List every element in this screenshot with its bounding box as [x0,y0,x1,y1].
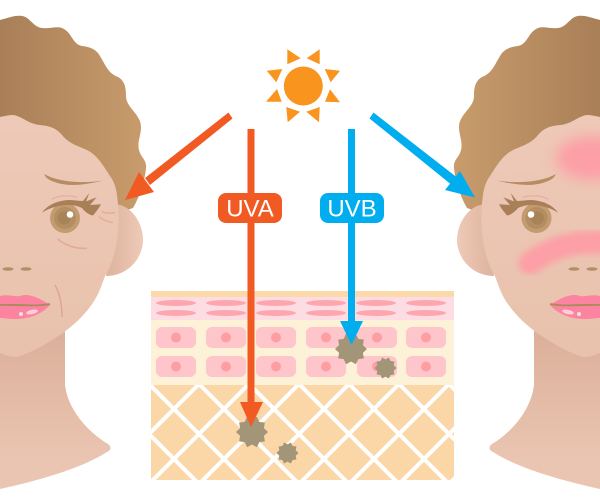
right eyebrow [497,174,556,185]
stratum corneum: pink layer with flat cells [151,297,454,320]
arrow: UVB to right face [370,112,475,198]
skin cross-section diagram [74,291,574,499]
left face skin [0,115,119,357]
melanin spot: dermis small [276,443,299,463]
left nose [2,267,32,271]
left lips [0,295,50,319]
right eye [499,193,558,233]
left cheek wrinkle [58,239,87,248]
left ear [106,204,143,276]
right face: sunburned skin from UVB [454,16,600,489]
melanin spot: epidermis large [335,334,367,364]
right hair [454,16,600,220]
label: UVA: UVA [226,196,274,222]
melanin spot: epidermis small [374,358,397,378]
arrow: UVA down to dermis [240,129,263,427]
icon: sun [266,49,340,122]
left eyebrow [44,174,103,185]
left face: aged skin from UVA [0,16,146,489]
label: UVB [320,193,384,223]
forehead sunburn [556,136,600,180]
arrow: UVB down to epidermis [340,129,363,345]
right neck [489,320,600,489]
left hair [0,16,146,220]
right lips [550,295,600,319]
arrow: UVA to left face [125,112,232,200]
left eye [42,193,101,233]
left neck [0,320,111,489]
left crow's feet wrinkles [99,212,115,222]
right nose [568,267,598,271]
left smile line [55,285,62,317]
melanin spot: dermis large [236,417,268,447]
right ear [457,204,494,276]
dermis: collagen lattice [151,385,454,480]
label: UVB: UVB [327,196,377,222]
cheek sunburn [530,242,600,263]
surface layer [151,291,454,297]
epidermis: cream layer with cells [151,320,454,385]
label: UVA [218,193,282,223]
right face skin [481,115,600,357]
